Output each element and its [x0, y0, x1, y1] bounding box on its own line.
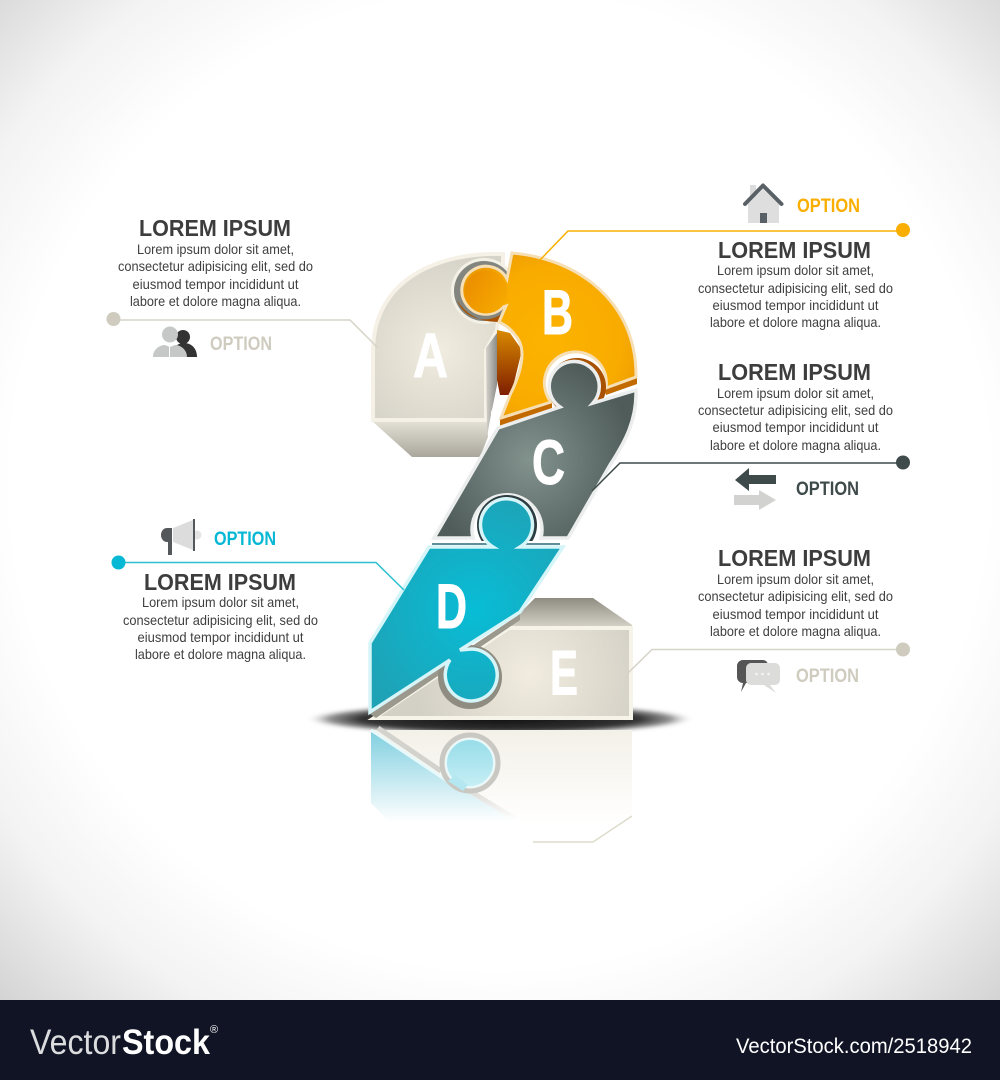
piece E: E	[550, 638, 578, 708]
numeral 2 built from five puzzle pieces	[370, 253, 637, 718]
text block C: LOREM IPSUM	[718, 359, 871, 385]
footer logo: Stock	[122, 1023, 210, 1062]
text block B: LOREM IPSUM	[718, 237, 871, 263]
footer logo: ®	[210, 1024, 218, 1036]
text block E: LOREM IPSUM	[718, 545, 871, 571]
footer logo	[30, 1023, 218, 1062]
text block B: consectetur adipisicing elit, sed do	[698, 280, 893, 296]
leader line E	[628, 642, 910, 673]
text block E: Lorem ipsum dolor sit amet,	[717, 571, 874, 587]
icon: arrows	[734, 468, 776, 510]
icon: house	[745, 185, 782, 223]
text block C: labore et dolore magna aliqua.	[710, 437, 881, 453]
text block D: LOREM IPSUM	[144, 569, 296, 595]
leader line A	[106, 312, 378, 348]
text block D: labore et dolore magna aliqua.	[135, 646, 306, 662]
piece A: A	[413, 321, 448, 391]
footer logo: Vector	[30, 1023, 121, 1062]
leader line B	[540, 223, 910, 260]
text block D	[123, 569, 318, 662]
text block E: labore et dolore magna aliqua.	[710, 623, 881, 639]
text block B: eiusmod tempor incididunt ut	[712, 297, 879, 313]
option label E: OPTION	[796, 666, 859, 687]
footer url: VectorStock.com/2518942	[736, 1035, 972, 1058]
option label C: OPTION	[796, 479, 859, 500]
text block A: eiusmod tempor incididunt ut	[132, 276, 299, 292]
text block C	[698, 359, 893, 453]
piece B: B	[542, 278, 573, 348]
option label A: OPTION	[210, 334, 272, 355]
option label D: OPTION	[214, 529, 276, 550]
leader line D	[112, 556, 404, 590]
text block A: LOREM IPSUM	[139, 215, 291, 241]
piece A	[372, 254, 517, 457]
text block E	[698, 545, 893, 639]
piece D: D	[436, 572, 467, 642]
icon: people	[153, 326, 197, 357]
reflection of the numeral	[371, 728, 632, 842]
text block B	[698, 237, 893, 330]
text block B: Lorem ipsum dolor sit amet,	[717, 262, 874, 278]
footer band	[0, 1000, 1000, 1080]
piece B	[462, 253, 637, 426]
inner orange fold	[497, 330, 522, 395]
text block E: eiusmod tempor incididunt ut	[712, 606, 879, 622]
text block A: consectetur adipisicing elit, sed do	[118, 258, 313, 274]
piece E	[370, 598, 632, 718]
icon: megaphone	[161, 519, 202, 555]
leader line C	[592, 456, 910, 491]
text block C: eiusmod tempor incididunt ut	[712, 419, 879, 435]
text block D: Lorem ipsum dolor sit amet,	[142, 594, 299, 610]
text block A	[118, 215, 313, 309]
text block B: labore et dolore magna aliqua.	[710, 314, 881, 330]
text block D: eiusmod tempor incididunt ut	[138, 629, 304, 645]
text block A: Lorem ipsum dolor sit amet,	[137, 241, 294, 257]
text block E: consectetur adipisicing elit, sed do	[698, 588, 893, 604]
piece C	[434, 361, 636, 555]
text block A: labore et dolore magna aliqua.	[130, 293, 301, 309]
option label B: OPTION	[797, 196, 860, 217]
icon: speech bubbles	[737, 660, 780, 693]
piece C: C	[532, 428, 565, 498]
text block C: consectetur adipisicing elit, sed do	[698, 402, 893, 418]
ground shadow	[305, 703, 695, 735]
text block C: Lorem ipsum dolor sit amet,	[717, 385, 874, 401]
piece D	[370, 499, 563, 712]
white gap	[491, 398, 510, 437]
text block D: consectetur adipisicing elit, sed do	[123, 612, 318, 628]
